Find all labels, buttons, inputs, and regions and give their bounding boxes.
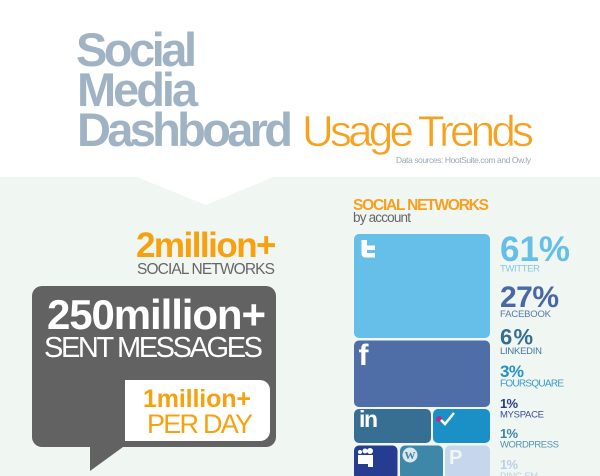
legend: twitter: TWITTER bbox=[500, 264, 540, 274]
tile: ping.fm bbox=[445, 446, 490, 476]
heading: social networks by account: SOCIAL NETWORKS bbox=[353, 197, 489, 214]
legend: foursquare: FOURSQUARE bbox=[500, 379, 564, 390]
legend: facebook: 27% bbox=[500, 281, 559, 314]
legend: foursquare bbox=[500, 362, 564, 390]
tile: wordpress bbox=[400, 446, 443, 476]
treemap bbox=[354, 234, 490, 476]
legend: myspace bbox=[500, 396, 544, 421]
legend: wordpress: WORDPRESS bbox=[500, 440, 559, 451]
tile: twitter bbox=[354, 234, 490, 338]
tile: myspace bbox=[354, 446, 398, 476]
legend: foursquare: 3% bbox=[500, 362, 524, 381]
legend: linkedin bbox=[500, 325, 542, 357]
tile: foursquare bbox=[433, 409, 490, 443]
legend: myspace: 1% bbox=[500, 396, 518, 411]
legend: linkedin: LINKEDIN bbox=[500, 346, 542, 357]
legend: facebook: FACEBOOK bbox=[500, 309, 552, 320]
callout: per day: 1million+ bbox=[143, 385, 251, 413]
legend: ping.fm: 1% bbox=[500, 457, 518, 472]
callout: per day: PER DAY bbox=[147, 409, 253, 439]
speech bubble: sent messages bbox=[32, 286, 276, 471]
sent messages label: SENT MESSAGES bbox=[44, 332, 263, 364]
legend: wordpress bbox=[500, 426, 559, 451]
title bbox=[76, 23, 293, 156]
title: Social bbox=[76, 23, 197, 76]
tile: wordpress: W bbox=[404, 450, 416, 462]
tile: facebook bbox=[354, 339, 490, 407]
stat: social networks: 2million+ bbox=[136, 226, 276, 265]
legend: ping.fm bbox=[500, 457, 538, 476]
tile: ping.fm: P bbox=[449, 447, 462, 469]
background panel bbox=[0, 177, 600, 476]
tile: linkedin bbox=[354, 406, 431, 443]
legend: linkedin: 6% bbox=[500, 325, 533, 350]
heading: social networks by account: by account bbox=[353, 210, 411, 225]
legend: wordpress: 1% bbox=[500, 426, 518, 441]
250million: 250million+ bbox=[47, 291, 266, 338]
title: Media bbox=[77, 63, 199, 116]
subtitle: Usage Trends bbox=[302, 107, 534, 156]
callout: per day bbox=[125, 380, 270, 441]
legend: myspace: MYSPACE bbox=[500, 410, 544, 421]
data sources: Data sources: HootSuite.com and Ow.ly bbox=[396, 155, 532, 165]
heading: social networks by account bbox=[353, 197, 489, 225]
stat: social networks: SOCIAL NETWORKS bbox=[137, 261, 275, 278]
title: Dashboard bbox=[77, 103, 293, 156]
legend: twitter: 61% bbox=[500, 230, 570, 269]
tile: linkedin: in bbox=[359, 406, 378, 432]
tile: facebook: f bbox=[358, 339, 370, 372]
